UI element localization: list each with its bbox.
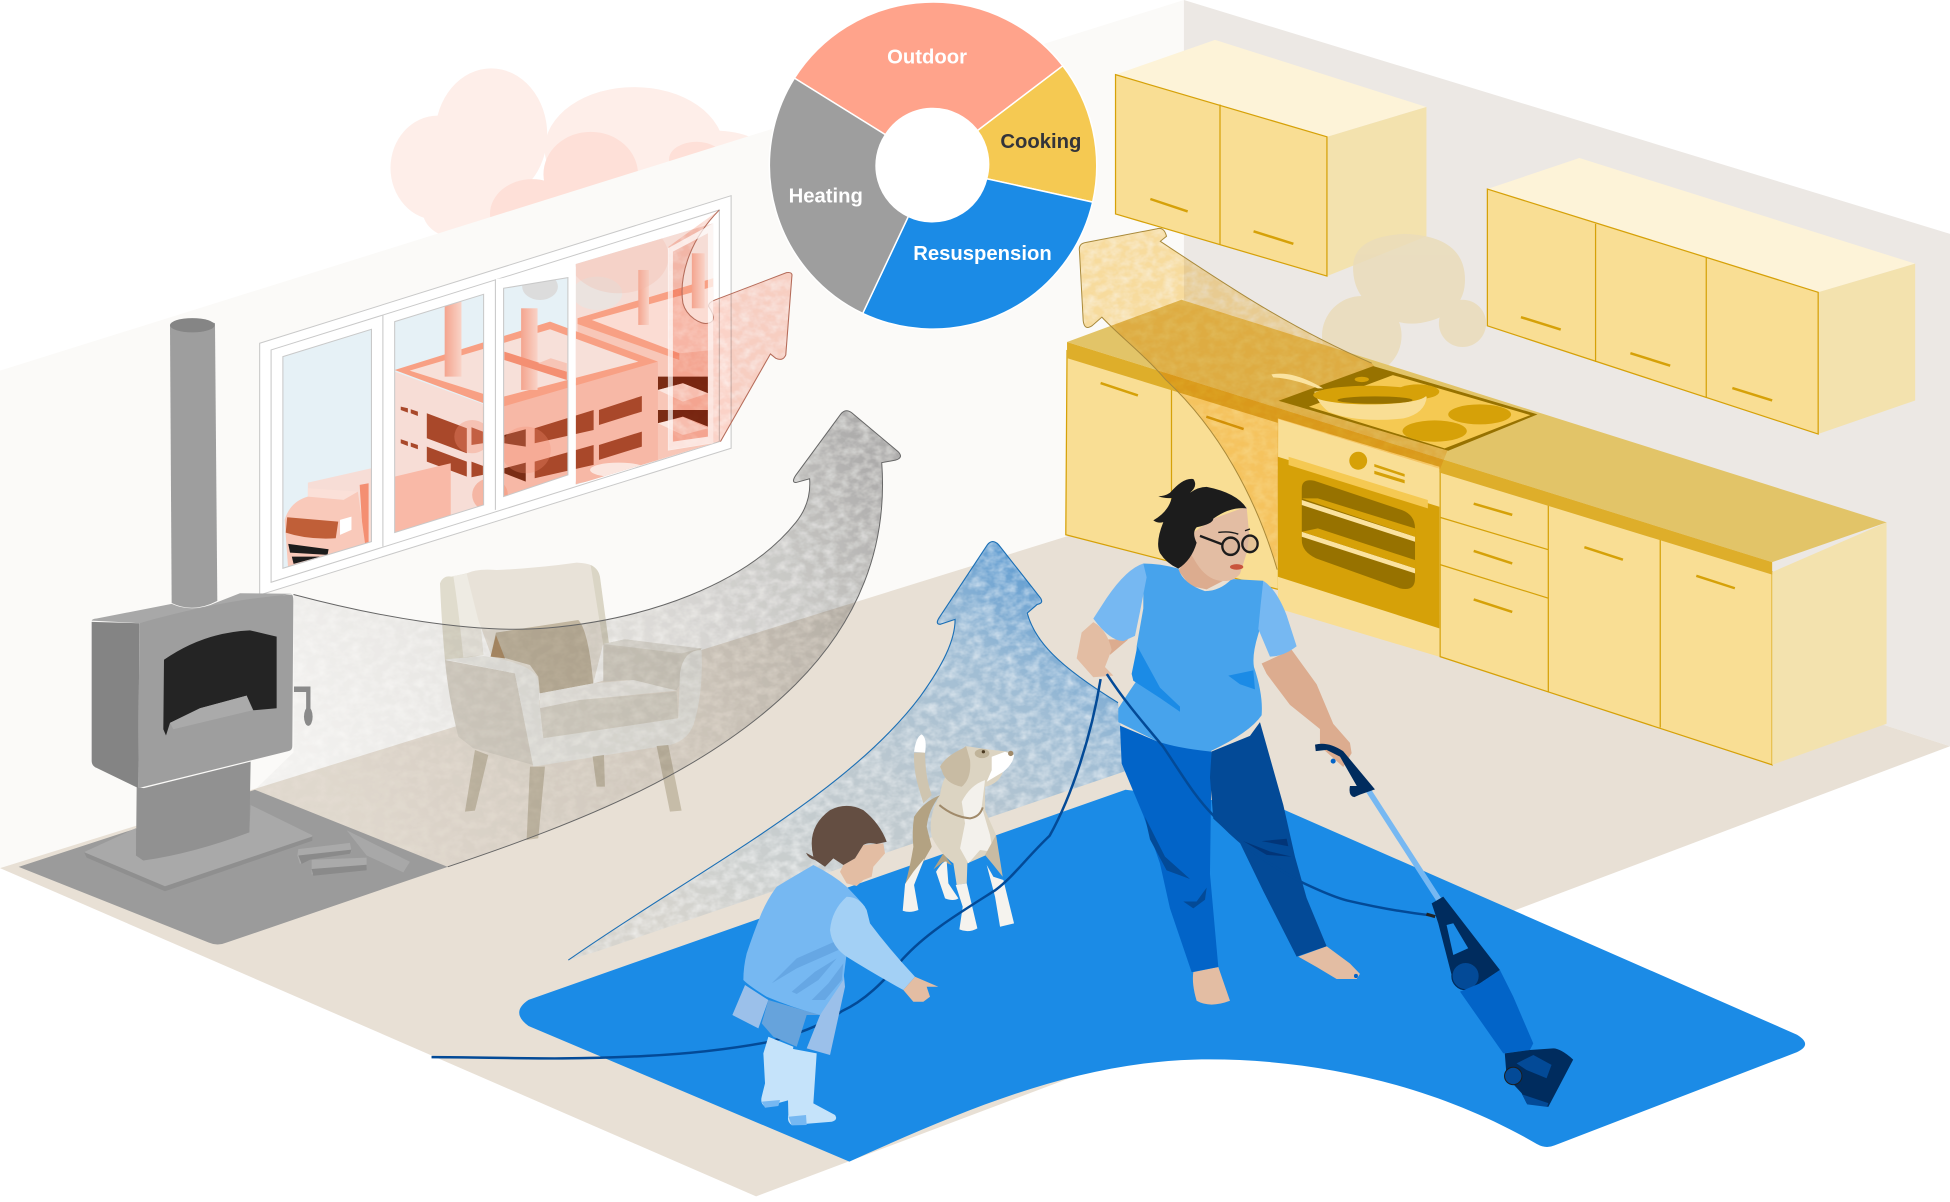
- eyebrows: [1218, 529, 1250, 534]
- truck: [285, 468, 371, 570]
- firewood logs: [297, 830, 410, 876]
- left sleeve: [1093, 563, 1147, 641]
- left forearm: [1108, 639, 1128, 655]
- resuspension arrow: [568, 542, 1125, 960]
- pie centre: [876, 108, 990, 223]
- pie chart: [769, 2, 1097, 329]
- factory and truck view: [284, 224, 714, 568]
- hob and pan: [1271, 366, 1538, 451]
- right wall: [1184, 0, 1950, 746]
- stove top: [92, 593, 292, 623]
- vacuum tube: [1460, 970, 1533, 1053]
- sleeve: [830, 897, 915, 990]
- dog: [903, 734, 1014, 931]
- child: [732, 806, 938, 1125]
- cable to wall: [432, 679, 1101, 1058]
- jeans creases: [1145, 817, 1292, 908]
- hand: [903, 977, 938, 1002]
- firebox: [163, 630, 277, 736]
- second factory: [578, 253, 713, 480]
- ash: [170, 696, 253, 729]
- outdoor pollution clouds: [390, 68, 767, 249]
- stove pedestal: [136, 762, 251, 861]
- floor: [0, 500, 1950, 1196]
- stove side: [92, 622, 139, 788]
- segment: resuspension: [863, 179, 1093, 329]
- armchair: [440, 563, 702, 840]
- worktop: [1067, 300, 1887, 575]
- window: [260, 196, 792, 595]
- lips: [1230, 564, 1243, 570]
- frying pan: [1271, 374, 1427, 420]
- segment: heating: [769, 78, 908, 313]
- woman: [1077, 479, 1360, 1005]
- face: [840, 843, 885, 886]
- kitchen: [1066, 40, 1915, 765]
- hair: [1153, 479, 1247, 569]
- main factory: [395, 220, 669, 533]
- neck: [1178, 546, 1223, 589]
- vacuum cleaner: [1315, 744, 1573, 1107]
- stove plate: [84, 805, 312, 887]
- right foot: [1298, 946, 1360, 979]
- window frame: [260, 196, 731, 595]
- chimney cap: [170, 318, 215, 332]
- base cabinets: [1066, 351, 1887, 765]
- haze: [576, 224, 713, 332]
- right sleeve: [1258, 581, 1297, 657]
- wood stove: [84, 318, 410, 891]
- vacuum body: [1432, 897, 1500, 992]
- left foot: [1193, 967, 1230, 1005]
- coat: [743, 865, 865, 1015]
- stove handle: [294, 689, 313, 726]
- legs: [761, 1037, 836, 1125]
- face: [1188, 507, 1249, 581]
- steam: [1322, 234, 1486, 376]
- segment: cooking: [977, 66, 1097, 202]
- jeans right leg: [1210, 722, 1327, 957]
- stove front: [138, 595, 293, 788]
- segment: cooking: Cooking: [1000, 131, 1081, 153]
- hand fingers over handle: [1331, 759, 1336, 764]
- vacuum floor head: [1505, 1048, 1573, 1107]
- glazing lines: [283, 278, 568, 568]
- segment: resuspension: Resuspension: [913, 243, 1052, 265]
- chimney: [170, 320, 217, 608]
- segment: outdoor: Outdoor: [887, 46, 967, 68]
- vacuum handle: [1315, 744, 1375, 797]
- toenail: [1354, 974, 1358, 978]
- stove hearth: [19, 790, 448, 945]
- glasses: [1200, 536, 1258, 555]
- segment: outdoor: [794, 2, 1063, 135]
- cooking arrow: [1079, 228, 1448, 570]
- vacuum pole: [1368, 790, 1440, 902]
- right arm: [1262, 650, 1352, 767]
- t-shirt: [1118, 563, 1263, 751]
- shirt shadows: [1132, 646, 1255, 712]
- carpet: [519, 790, 1805, 1162]
- coat folds: [772, 940, 843, 1000]
- oven: [1278, 418, 1439, 657]
- vacuum cable: [1107, 674, 1430, 915]
- vacuum motor: [1452, 962, 1479, 990]
- vacuum grip hole: [1447, 923, 1468, 955]
- heating arrow: [255, 411, 900, 867]
- upper cabinet right: [1487, 158, 1915, 434]
- dress: [732, 970, 845, 1055]
- jeans left leg: [1120, 726, 1218, 972]
- cable plug: [1426, 914, 1435, 917]
- segment: heating: Heating: [789, 186, 863, 208]
- upper cabinet left: [1116, 40, 1426, 276]
- left hand: [1077, 622, 1113, 677]
- outdoor arrow: [668, 210, 792, 451]
- sliding sash: [495, 267, 576, 510]
- hair: [806, 806, 887, 867]
- left wall: [0, 0, 1184, 868]
